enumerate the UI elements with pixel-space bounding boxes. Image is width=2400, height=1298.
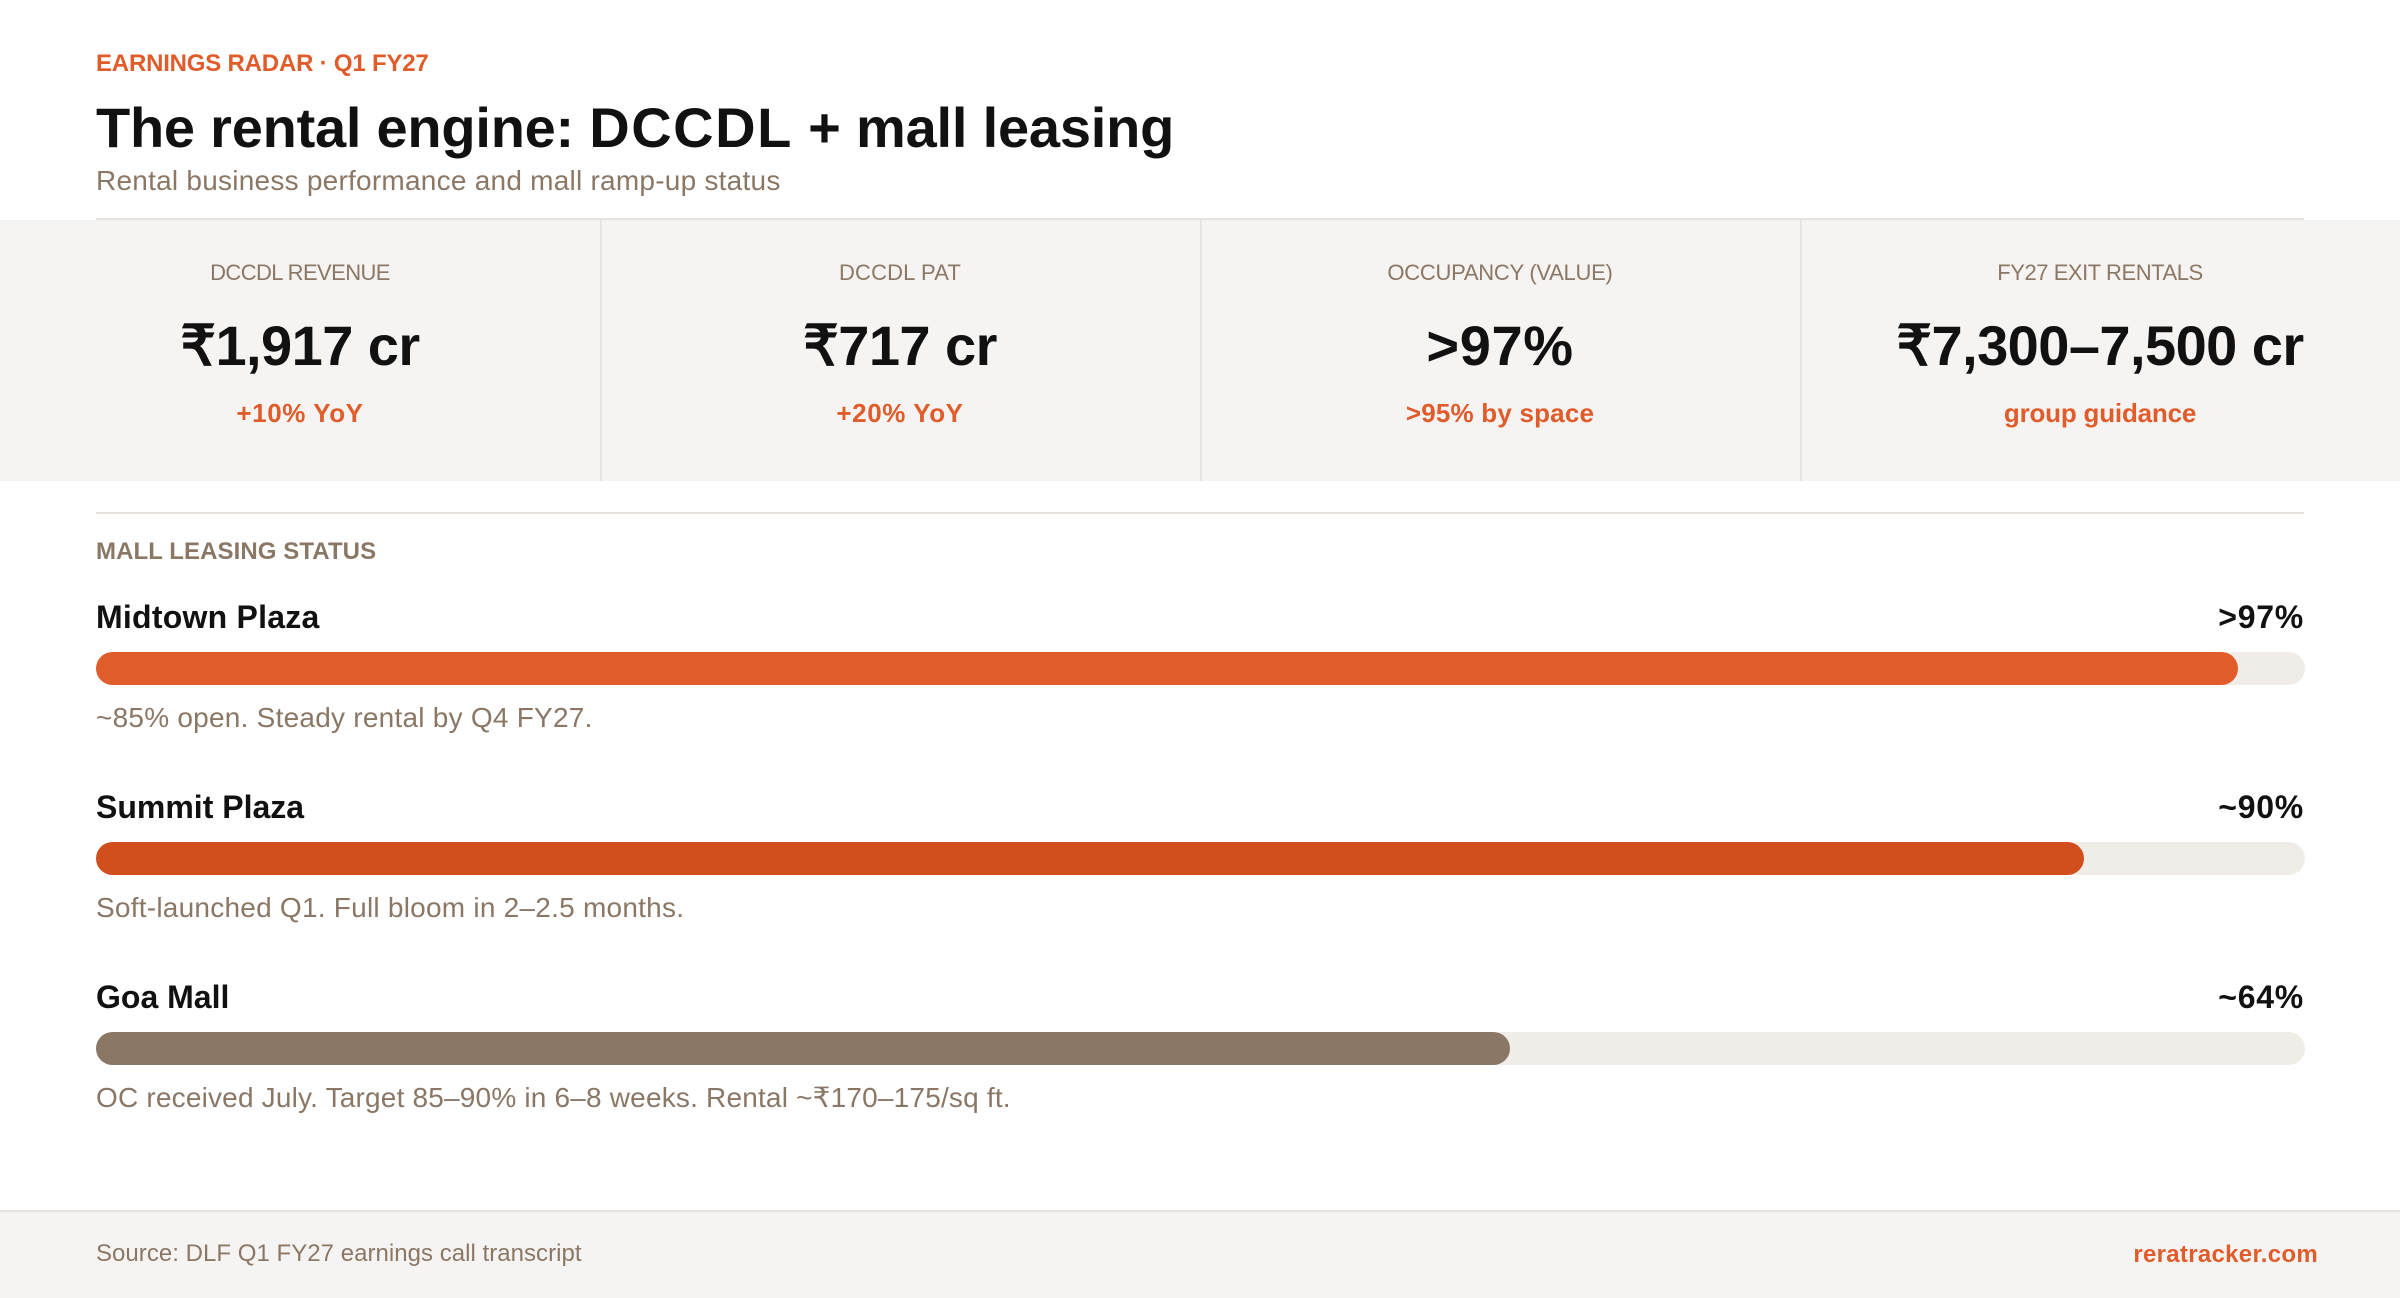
bar row: Summit Plaza: [96, 789, 2305, 923]
KPI: DCCDL revenue: DCCDL REVENUE: [210, 260, 390, 285]
bar row: Goa Mall: Goa Mall: [96, 979, 229, 1015]
KPI: DCCDL PAT: ₹717 cr: [803, 314, 997, 377]
bar row: Summit Plaza: Soft-launched Q1. Full bloom in 2–2.5 months.: [96, 892, 684, 923]
eyebrow: EARNINGS RADAR · Q1 FY27: [96, 50, 429, 77]
bar row: Midtown Plaza: ~85% open. Steady rental by Q4 FY27.: [96, 702, 593, 733]
KPI: FY27 exit rentals: [1896, 260, 2304, 428]
KPI: FY27 exit rentals: FY27 EXIT RENTALS: [1997, 260, 2203, 285]
section divider: [96, 512, 2304, 514]
KPI: DCCDL revenue: [0, 220, 602, 481]
brand: reratracker.com: [2133, 1241, 2318, 1268]
KPI: DCCDL revenue: +10% YoY: [236, 398, 364, 428]
bar row: Summit Plaza: Summit Plaza: [96, 789, 304, 825]
KPI: occupancy: >97%: [1426, 314, 1574, 377]
section heading: MALL LEASING STATUS: [96, 538, 376, 565]
bar row: Goa Mall: ~64%: [2218, 979, 2304, 1015]
KPI: DCCDL PAT: +20% YoY: [836, 398, 964, 428]
footer: [0, 1210, 2400, 1298]
KPI: DCCDL PAT: [600, 220, 1202, 481]
KPI: occupancy: >95% by space: [1406, 398, 1594, 428]
panel: KPI band: [0, 220, 2400, 481]
KPI: FY27 exit rentals: ₹7,300–7,500 cr: [1896, 314, 2304, 377]
subtitle: Rental business performance and mall ramp-up status: [96, 165, 781, 196]
bar row: Midtown Plaza: Midtown Plaza: [96, 599, 320, 635]
title: The rental engine: DCCDL + mall leasing: [96, 96, 1174, 159]
bar row: Goa Mall: [96, 979, 2305, 1113]
KPI: occupancy: [1200, 220, 1802, 481]
bar row: Midtown Plaza: [96, 599, 2305, 733]
bar row: Goa Mall: OC received July. Target 85–90% in 6–8 weeks. Rental ~₹170–175/sq ft.: [96, 1082, 1011, 1113]
source note: Source: DLF Q1 FY27 earnings call transcript: [96, 1240, 582, 1267]
bar row: Summit Plaza: ~90%: [2218, 789, 2304, 825]
header divider: [96, 218, 2304, 220]
KPI: DCCDL revenue: ₹1,917 cr: [180, 314, 420, 377]
KPI: FY27 exit rentals: group guidance: [2004, 398, 2196, 428]
bar row: Midtown Plaza: >97%: [2218, 599, 2304, 635]
KPI: occupancy: OCCUPANCY (VALUE): [1387, 260, 1613, 285]
KPI: DCCDL PAT: DCCDL PAT: [839, 260, 961, 285]
